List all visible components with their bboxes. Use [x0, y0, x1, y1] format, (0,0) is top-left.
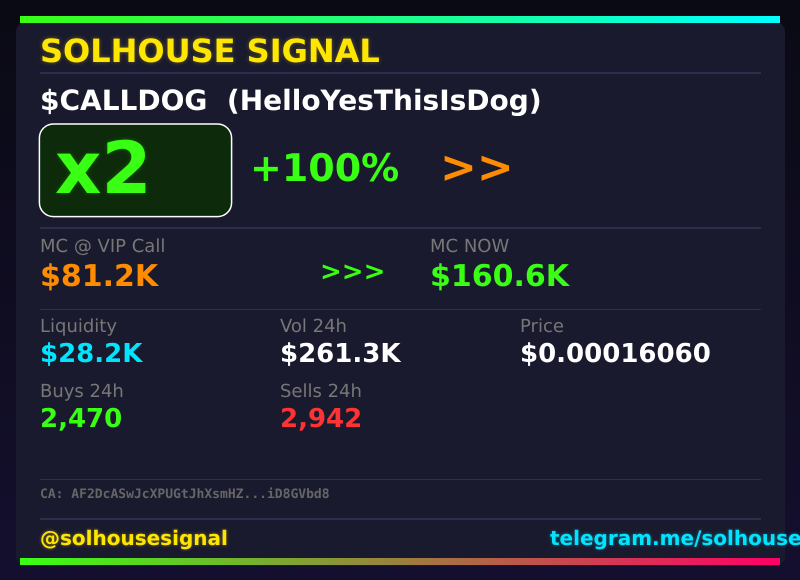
title: SOLHOUSE SIGNAL	[40, 32, 380, 70]
liquidity value: $28.2K	[40, 339, 142, 369]
volume value: $261.3K	[280, 339, 400, 369]
MC now label: MC NOW	[430, 236, 509, 257]
liquidity label: Liquidity	[40, 316, 117, 337]
MC at call value: $81.2K	[40, 259, 158, 294]
sells value: 2,942	[280, 404, 362, 434]
price label: Price	[520, 316, 564, 337]
buys value: 2,470	[40, 404, 122, 434]
price value: $0.00016060	[520, 339, 711, 369]
volume label: Vol 24h	[280, 316, 347, 337]
multiplier badge	[38, 123, 232, 218]
token name: $CALLDOG (HelloYesThisIsDog)	[40, 84, 542, 117]
percent gain: +100%	[250, 146, 399, 190]
sells label: Sells 24h	[280, 381, 362, 402]
buys label: Buys 24h	[40, 381, 124, 402]
top gradient bar	[20, 16, 780, 23]
contract address: CA: AF2DcASwJcXPUGtJhXsmHZ...iD8GVbd8	[40, 487, 330, 502]
MC at call label: MC @ VIP Call	[40, 236, 165, 257]
arrows: orange: >>	[440, 142, 514, 193]
arrows: green: >>>	[320, 257, 385, 287]
multiplier value: x2	[55, 126, 152, 210]
bottom gradient bar	[20, 558, 780, 565]
MC now value: $160.6K	[430, 259, 569, 294]
footer handle: @solhousesignal	[40, 526, 228, 550]
